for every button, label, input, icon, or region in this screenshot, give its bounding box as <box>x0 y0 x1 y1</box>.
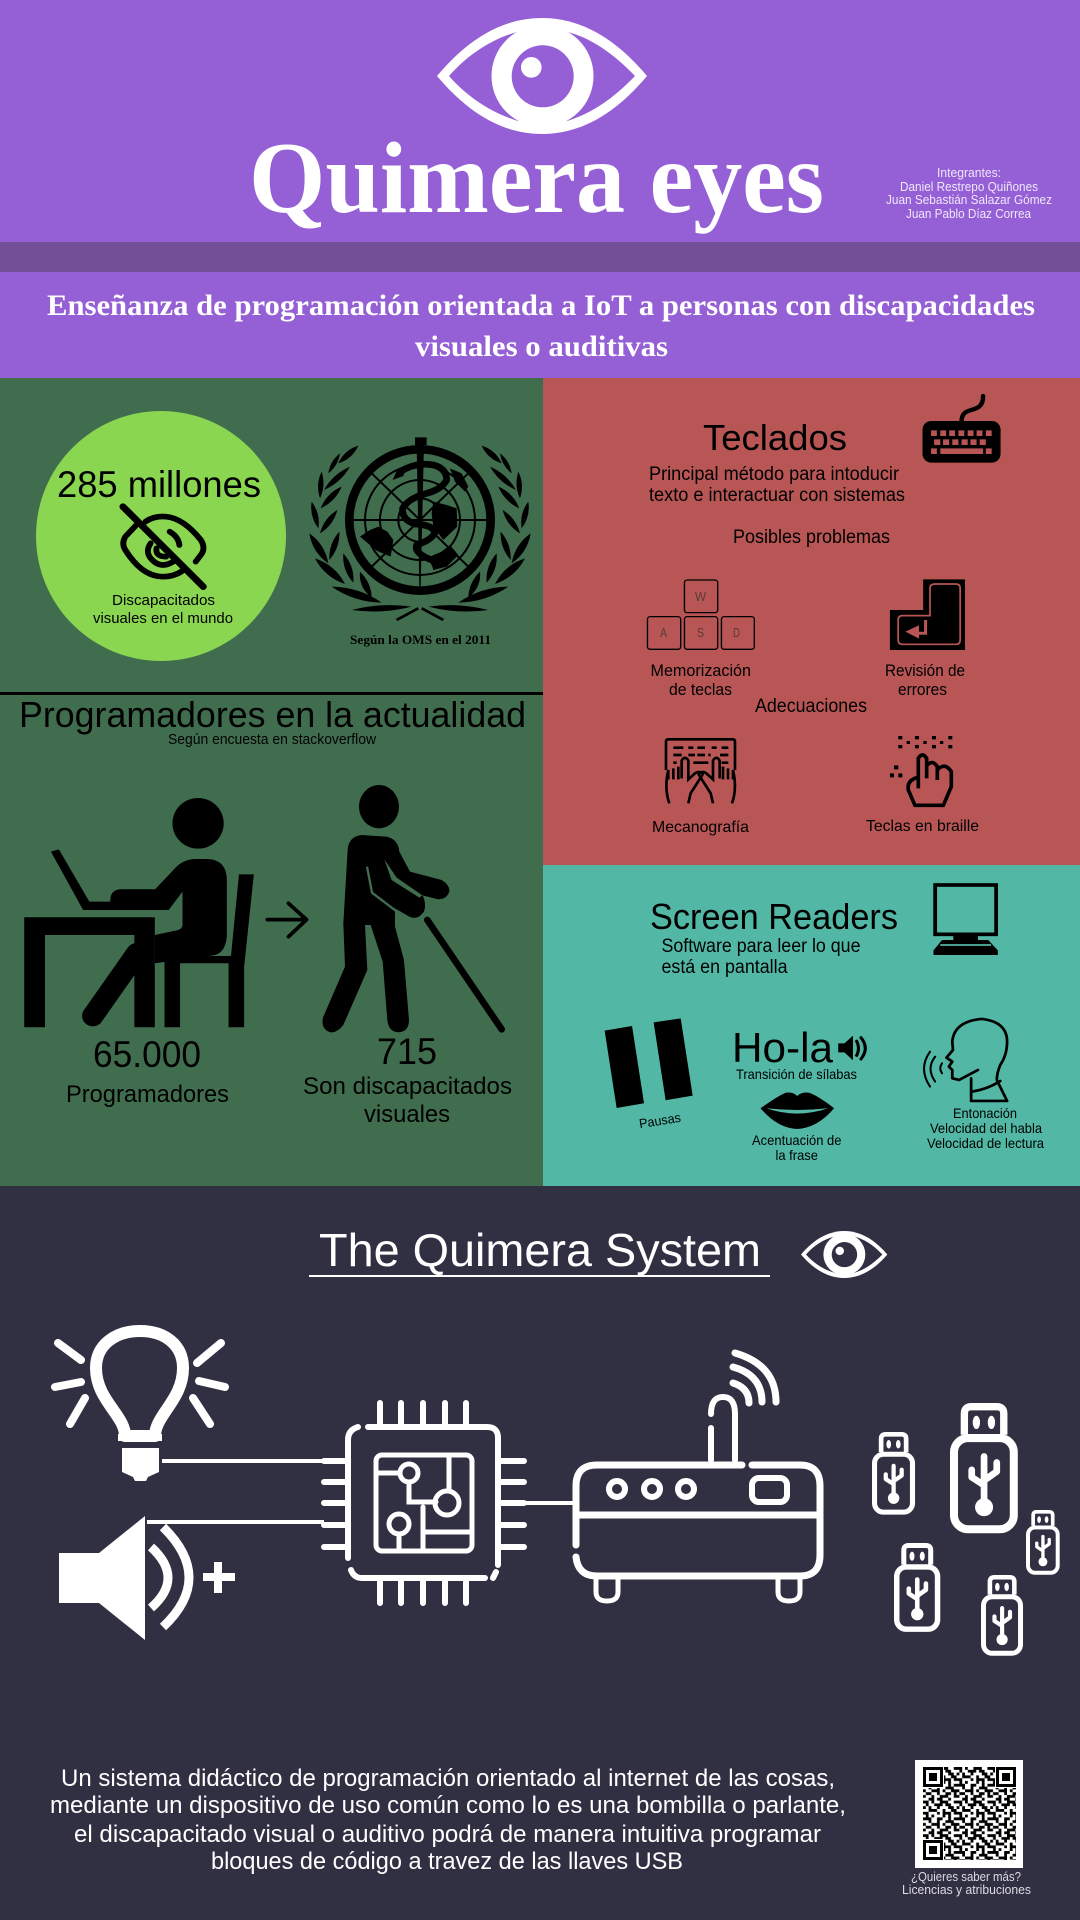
label: entonacion: Velocidad del habla <box>930 1120 1042 1136</box>
stat: 715 visually impaired: visuales <box>364 1101 450 1128</box>
icon: small eye <box>801 1231 887 1278</box>
icon: keyboard <box>922 396 1001 463</box>
team members: Daniel Restrepo Quiñones <box>900 179 1038 194</box>
label: entonacion: Velocidad de lectura <box>927 1135 1044 1151</box>
description text: el discapacitado visual o auditivo podrá de manera intuitiva programar <box>74 1821 821 1848</box>
label: memorizacion: de teclas <box>669 680 732 699</box>
key letters: A <box>660 625 667 640</box>
label: mecanografia: Mecanografía <box>652 819 749 836</box>
label: acentuacion <box>752 1132 842 1163</box>
team members: Juan Pablo Díaz Correa <box>906 206 1032 221</box>
icon: usb keys <box>875 1407 1058 1653</box>
panel: header <box>0 0 1080 378</box>
header band <box>0 242 1080 272</box>
key letters <box>660 589 740 640</box>
QR code <box>915 1760 1023 1868</box>
lime circle with statistic: 285 millones <box>57 464 261 505</box>
description: texto e interactuar con sistemas <box>649 485 905 506</box>
description: Software para leer lo que <box>662 936 860 957</box>
heading: screen readers: Screen Readers <box>650 896 898 937</box>
subtitle: visuales o auditivas <box>415 330 668 363</box>
icon: enter key <box>890 579 965 650</box>
panel: quimera system <box>0 1186 1080 1920</box>
description text <box>50 1765 846 1875</box>
heading: adecuaciones: Adecuaciones <box>755 696 867 717</box>
icon: crossed eye <box>123 507 203 587</box>
icon: pause bars <box>605 1018 693 1108</box>
QR caption: ¿Quieres saber más? <box>911 1869 1021 1884</box>
panel: screen readers <box>543 865 1080 1186</box>
icon: WHO emblem <box>309 437 531 620</box>
description <box>649 464 905 506</box>
lime circle with statistic <box>36 411 286 661</box>
label: pausas: Pausas <box>638 1110 682 1131</box>
icon: microchip <box>324 1403 524 1603</box>
icon: WASD keys <box>647 580 754 649</box>
subtitle: Enseñanza de programación orientada a IoT a personas con discapacidades <box>47 289 1035 322</box>
icon: speaker <box>59 1516 235 1640</box>
heading: teclados: Teclados <box>703 417 847 458</box>
icon: lips <box>760 1092 834 1129</box>
description text: bloques de código a travez de las llaves USB <box>211 1848 683 1875</box>
icon: speaking head <box>924 1019 1007 1101</box>
icon: wifi router <box>576 1353 820 1601</box>
stat: 65.000 programmers <box>66 1034 229 1108</box>
icon: person with cane <box>322 785 502 1032</box>
label: braille: Teclas en braille <box>866 818 979 835</box>
title: Quimera eyes <box>249 122 824 235</box>
stat: 715 visually impaired <box>303 1031 512 1128</box>
team members: Integrantes: <box>937 165 1001 180</box>
icon: braille hand <box>890 736 952 805</box>
heading: posibles problemas: Posibles problemas <box>733 527 890 548</box>
label: acentuacion: la frase <box>776 1147 818 1163</box>
label: revision: Revisión de <box>885 661 965 680</box>
panel: statistics green <box>0 378 543 1186</box>
icon: eye logo <box>437 18 647 134</box>
QR caption <box>902 1869 1031 1897</box>
key letters: S <box>697 625 704 640</box>
label: memorizacion: Memorización <box>650 661 751 680</box>
arrow <box>267 903 306 937</box>
label: transicion: Transición de sílabas <box>736 1066 857 1082</box>
label: revision <box>885 661 965 699</box>
stat: 65.000 programmers: Programadores <box>66 1081 229 1108</box>
divider <box>0 692 543 695</box>
key letters: D <box>733 625 740 640</box>
panel: teclados <box>543 378 1080 865</box>
description: Principal método para intoducir <box>649 464 900 485</box>
team members: Juan Sebastián Salazar Gómez <box>886 192 1052 207</box>
icon: small speaker <box>838 1036 865 1060</box>
icon: typing hands <box>666 739 735 803</box>
description <box>662 936 860 978</box>
heading: programadores: Programadores en la actualidad <box>19 694 526 735</box>
subtitle <box>47 289 1035 363</box>
icon: light bulb <box>55 1331 225 1481</box>
syllable text: Ho-la <box>732 1024 834 1071</box>
team members <box>886 165 1052 221</box>
lime circle with statistic: Discapacitados <box>112 592 215 609</box>
icon: programmer at desk <box>24 798 254 1027</box>
stat: 715 visually impaired: 715 <box>377 1031 437 1072</box>
stat: 65.000 programmers: 65.000 <box>93 1034 201 1075</box>
heading: the quimera system: The Quimera System <box>319 1224 761 1276</box>
key letters: W <box>695 589 707 604</box>
source note: Según encuesta en stackoverflow <box>168 731 376 748</box>
label: entonacion: Entonación <box>953 1105 1017 1121</box>
stat: 715 visually impaired: Son discapacitados <box>303 1073 512 1100</box>
wires <box>147 1461 573 1522</box>
icon: monitor <box>933 885 998 955</box>
caption: OMS: Según la OMS en el 2011 <box>350 632 491 647</box>
description: está en pantalla <box>662 957 788 978</box>
QR caption: Licencias y atribuciones <box>902 1882 1031 1897</box>
lime circle with statistic: visuales en el mundo <box>93 610 233 627</box>
description text: mediante un dispositivo de uso común como lo es una bombilla o parlante, <box>50 1792 846 1819</box>
label: revision: errores <box>898 680 947 699</box>
label: entonacion <box>927 1105 1044 1151</box>
label: memorizacion <box>650 661 751 699</box>
label: acentuacion: Acentuación de <box>752 1132 842 1148</box>
description text: Un sistema didáctico de programación orientado al internet de las cosas, <box>61 1765 835 1792</box>
